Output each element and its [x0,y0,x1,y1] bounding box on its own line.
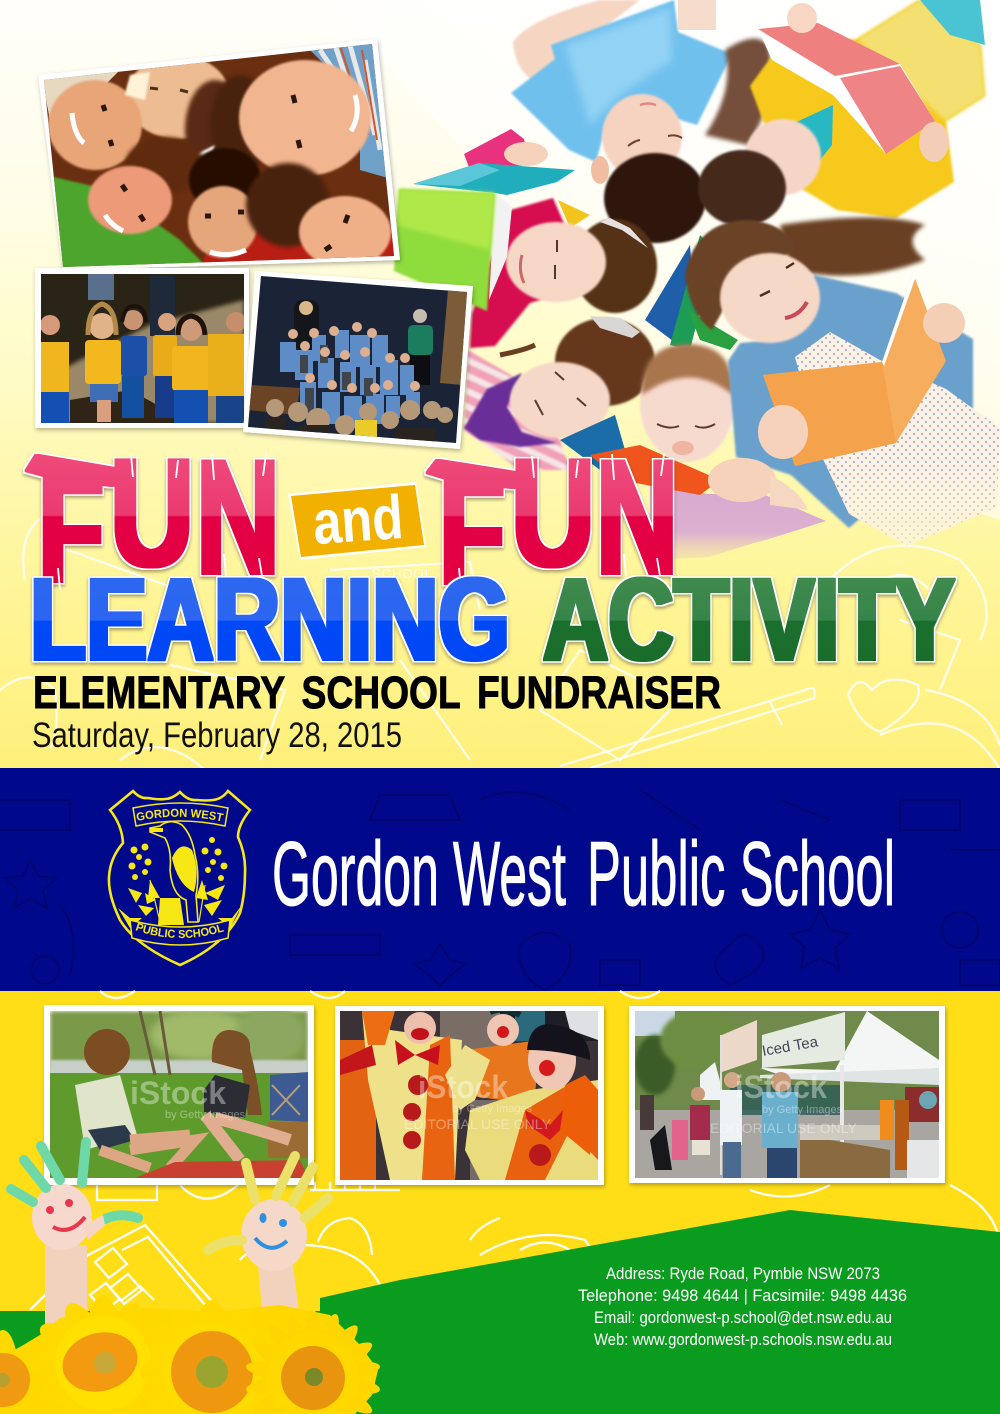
photo frame: pupils in yellow uniforms [35,268,249,428]
title: FUN (right): N [596,425,678,609]
logo: top scroll [132,802,229,827]
title: FUN (right): F [439,445,505,617]
doodles: upper white sketches [0,510,1000,770]
panel: bright yellow lower area [0,991,1000,1414]
child: blue shirt [511,0,732,243]
photo frame: picnic [44,1005,314,1185]
child: pink shirt with green book [394,129,657,348]
title: FUN (left): N [196,425,280,609]
logo: Gordon West shield [108,789,252,966]
subtitle: ELEMENTARY SCHOOL FUNDRAISER [33,667,721,718]
green hill [0,1210,1000,1414]
title: FUN (left) [27,425,280,615]
telephone line: Telephone: 9498 4644 | Facsimile: 9498 4436 [578,1287,907,1305]
photo frame: market stall: Iced Tea [761,1033,820,1060]
background: pale yellow gradient [0,0,1000,770]
background: white floor highlight [330,0,1000,520]
doodles: upper white sketches: SCHOOL [372,566,433,581]
badge: and: and [311,483,405,558]
email line: Email: gordonwest-p.school@det.nsw.edu.au [594,1309,892,1327]
sunflower: yellow petal mass [0,1305,378,1414]
logo: top scroll: GORDON WEST [136,808,224,822]
title: FUN (left): F [38,443,104,615]
child: bald boy [590,344,734,495]
doodles: lower white sketches [30,991,1000,1311]
title: FUN (right): U [511,426,595,599]
sunflowers [0,1294,382,1414]
photo frame: school choir on stage [243,271,475,449]
title: LEARNING: LEARNING [30,554,510,686]
sunflower: right [244,1310,382,1414]
sunflower: far left [0,1330,53,1414]
child: striped shirt and purple cardigan [464,316,655,470]
watermark: clowns photo: by Getty Images [452,1103,533,1115]
hand: mint fingers with red smiley [11,1142,138,1345]
logo: bottom scroll: PUBLIC SCHOOL [136,922,224,938]
hand: yellow fingers with blue smiley [208,1156,328,1320]
watermark: picnic photo: by Getty Images [165,1109,246,1121]
watermark: market photo: by Getty Images [762,1104,843,1116]
photo: children lying in a circle with books [394,0,1000,560]
event date: Saturday, February 28, 2015 [32,716,402,755]
logo: wattle sprigs [118,837,242,928]
photo frame: market stall [629,1006,945,1183]
panel: school banner [0,768,1000,991]
title: FUN (left): U [110,426,194,599]
floor centre shirts [645,235,738,350]
child: yellow shirt with red book [698,0,985,226]
contact details [578,1265,907,1349]
doodles: banner outlines [0,790,1000,990]
watermark: clowns photo: iStock [418,1069,508,1105]
photo frame: group of smiling children [38,39,400,270]
watermark: clowns photo: EDITORIAL USE ONLY [404,1116,551,1132]
child: smiling girl with orange book [685,218,1000,546]
school name: Gordon West [272,824,566,925]
title: jagged white cuts (right) [459,454,664,590]
watermark: market photo: iStock [735,1069,827,1105]
title: FUN (right) [428,425,678,617]
watermark: picnic photo [130,1075,246,1121]
address line: Address: Ryde Road, Pymble NSW 2073 [606,1265,880,1283]
web line: Web: www.gordonwest-p.schools.nsw.edu.au [594,1331,892,1349]
title: jagged white cuts (left) [58,454,266,590]
photo frame: clowns [335,1006,604,1185]
watermark: picnic photo: iStock [130,1075,226,1111]
sunflower: left [31,1294,175,1414]
sunflower: centre [139,1299,285,1414]
watermark: market photo: EDITORIAL USE ONLY [710,1120,857,1136]
logo: bird [150,822,198,925]
book: open lilac pages [650,470,826,560]
watermark: clowns photo [404,1069,551,1132]
watermark: market photo [710,1069,857,1136]
